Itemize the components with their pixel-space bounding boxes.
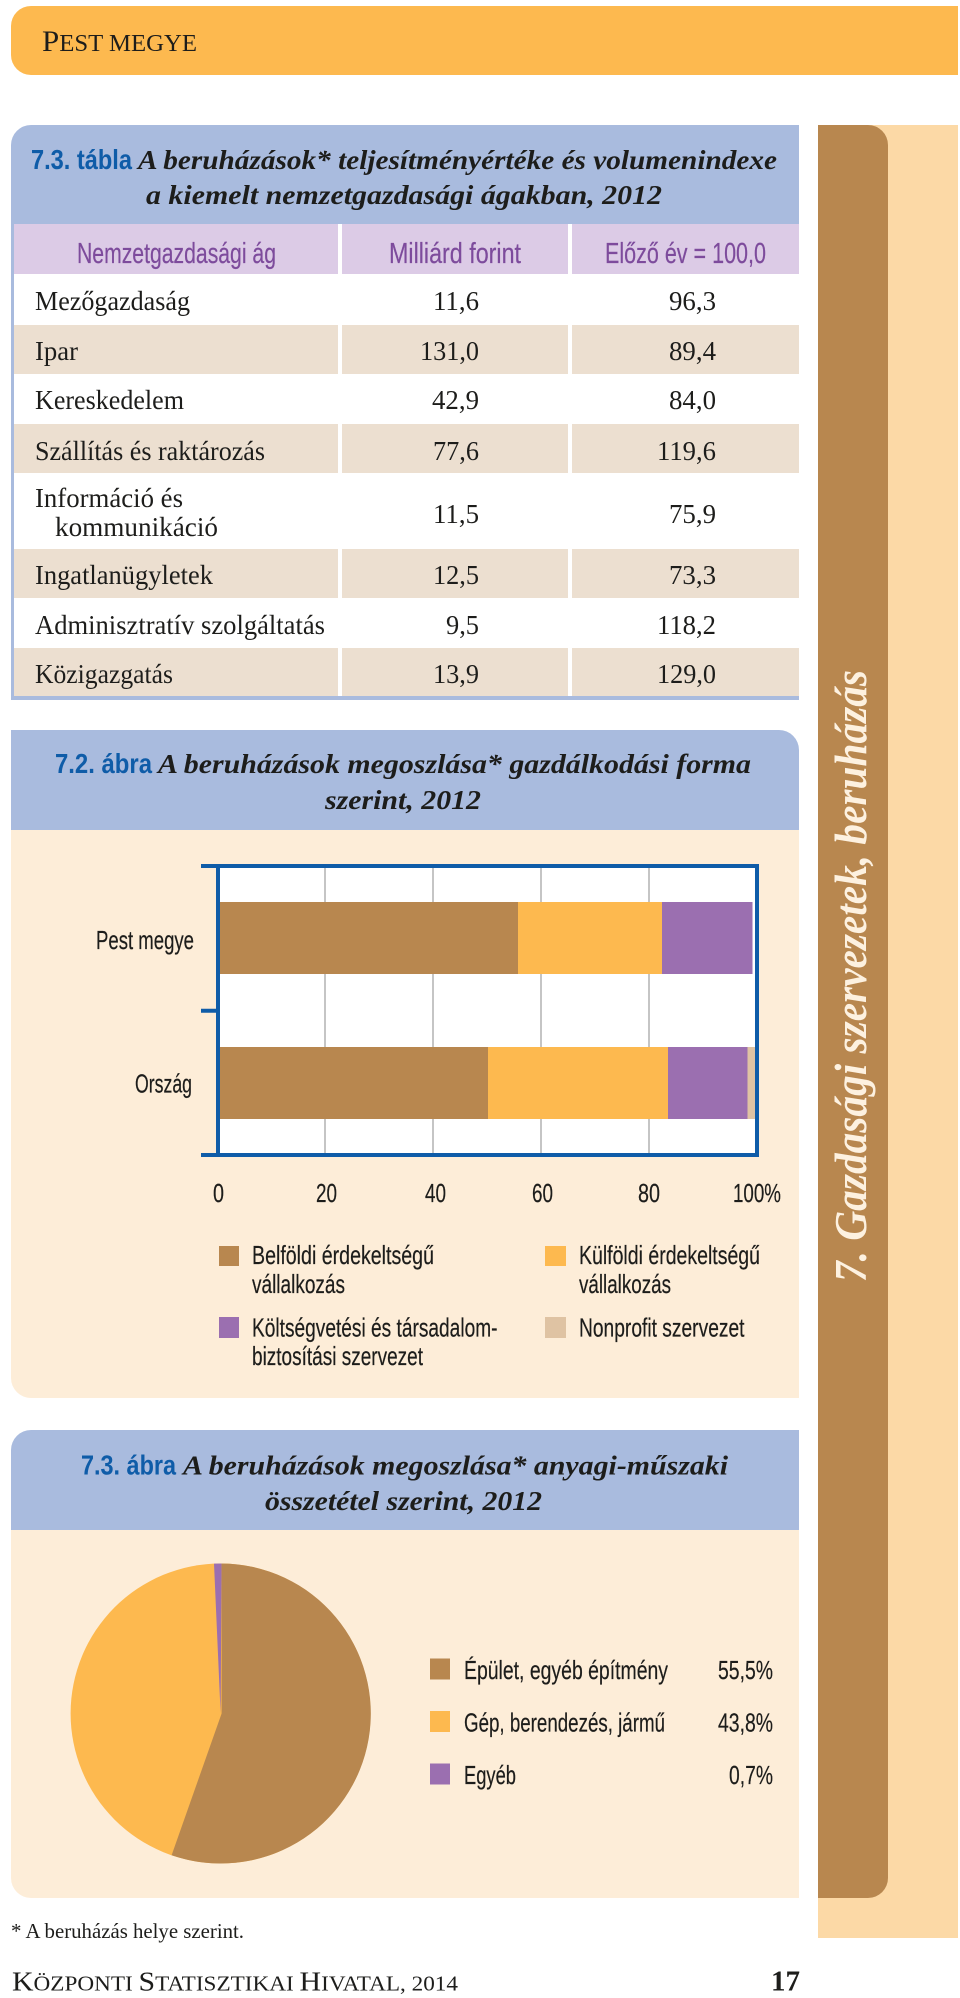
figure title: A beruházások megoszlása* gazdálkodási forma — [156, 749, 751, 779]
row: Információ és kommunikáció — [35, 483, 716, 542]
row: Adminisztratív szolgáltatás: Adminisztratív szolgáltatás — [35, 610, 325, 640]
row: Közigazgatás: 13,9 — [433, 659, 479, 689]
legend: ownership forms: vállalkozás — [252, 1269, 345, 1299]
axis labels: 60 — [532, 1178, 553, 1208]
panel: figure 7.3 — [11, 1430, 799, 1898]
panel: figure 7.2 — [11, 730, 799, 1398]
legend: pie — [430, 1655, 773, 1790]
row: Információ és kommunikáció: 75,9 — [669, 499, 716, 529]
axis labels: 100% — [733, 1178, 781, 1208]
table header row — [14, 224, 799, 274]
row: Közigazgatás — [14, 648, 799, 696]
legend: ownership forms: biztosítási szervezet — [252, 1341, 424, 1371]
row: Ingatlanügyletek — [14, 549, 799, 598]
row: Mezőgazdaság: Mezőgazdaság — [35, 286, 190, 316]
row: Információ és kommunikáció: Információ és — [35, 483, 183, 513]
table header row: Előző év = 100,0 — [605, 238, 766, 270]
bar: Pest megye — [220, 902, 752, 974]
legend: ownership forms: Belföldi érdekeltségű — [252, 1240, 434, 1270]
row: Ipar: Ipar — [35, 336, 78, 366]
bar: Ország — [220, 1047, 755, 1119]
axis labels: 80 — [638, 1178, 660, 1208]
axis labels — [213, 1178, 781, 1208]
side tab: chapter title — [818, 125, 958, 1938]
legend: ownership forms: vállalkozás — [579, 1269, 671, 1299]
row: Szállítás és raktározás: 119,6 — [657, 436, 716, 466]
footer: publisher: KÖZPONTI STATISZTIKAI HIVATAL, 2014 — [12, 1966, 459, 1996]
row: Szállítás és raktározás: 77,6 — [433, 436, 479, 466]
legend: ownership forms: Külföldi érdekeltségű — [579, 1240, 760, 1270]
table title: a kiemelt nemzetgazdasági ágakban, 2012 — [146, 180, 662, 210]
legend: pie: 55,5% — [718, 1655, 773, 1685]
row: Ingatlanügyletek: 73,3 — [669, 560, 716, 590]
panel: table 7.3 — [11, 125, 799, 700]
figure title: 7.3. ábra — [81, 1450, 176, 1480]
row: Ipar — [14, 325, 799, 374]
row: Információ és kommunikáció: kommunikáció — [55, 512, 218, 542]
stacked bar chart: Ország — [135, 1068, 192, 1098]
figure title: összetétel szerint, 2012 — [265, 1486, 542, 1516]
row: Kereskedelem — [35, 385, 716, 415]
page header band — [11, 6, 958, 75]
pie chart — [71, 1563, 371, 1864]
table title — [11, 125, 799, 224]
row: Információ és kommunikáció: 11,5 — [433, 499, 479, 529]
figure title — [11, 730, 799, 830]
row: Mezőgazdaság: 11,6 — [433, 286, 479, 316]
row: Kereskedelem: Kereskedelem — [35, 385, 184, 415]
table header row: Milliárd forint — [389, 238, 521, 270]
legend: ownership forms: Költségvetési és társadalom- — [252, 1312, 498, 1342]
row: Ipar: 131,0 — [420, 336, 479, 366]
legend: ownership forms: Nonprofit szervezet — [579, 1312, 745, 1342]
stacked bar chart — [96, 866, 781, 1208]
footer: page number: 17 — [771, 1966, 800, 1998]
figure title: szerint, 2012 — [324, 785, 481, 815]
figure title — [11, 1430, 799, 1530]
legend: pie: Épület, egyéb építmény — [464, 1655, 668, 1685]
axis labels: 20 — [316, 1178, 337, 1208]
panel background — [11, 830, 799, 1398]
row: Adminisztratív szolgáltatás — [35, 610, 716, 640]
heading: county name: PEST MEGYE — [42, 25, 197, 58]
row: Adminisztratív szolgáltatás: 9,5 — [446, 610, 479, 640]
row: Mezőgazdaság: 96,3 — [669, 286, 716, 316]
table header row: Nemzetgazdasági ág — [77, 238, 276, 270]
legend: ownership forms — [219, 1240, 760, 1371]
row: Szállítás és raktározás: Szállítás és raktározás — [35, 436, 265, 466]
row: Adminisztratív szolgáltatás: 118,2 — [657, 610, 716, 640]
table title: A beruházások* teljesítményértéke és volumenindexe — [136, 145, 777, 175]
legend: pie: Egyéb — [464, 1760, 516, 1790]
row: Kereskedelem: 84,0 — [669, 385, 716, 415]
row: Ingatlanügyletek: Ingatlanügyletek — [35, 560, 213, 590]
row: Ingatlanügyletek: 12,5 — [433, 560, 479, 590]
axis labels: 40 — [425, 1178, 446, 1208]
stacked bar chart: Pest megye — [96, 925, 194, 955]
legend: pie: 43,8% — [718, 1708, 773, 1738]
panel background — [11, 1529, 799, 1898]
row: Közigazgatás: 129,0 — [657, 659, 716, 689]
side tab: chapter title: 7. Gazdasági szervezetek, beruházás — [825, 670, 876, 1282]
table frame — [11, 224, 799, 700]
table title: 7.3. tábla — [31, 144, 132, 175]
row: Közigazgatás: Közigazgatás — [35, 659, 173, 689]
legend: pie: Gép, berendezés, jármű — [464, 1708, 665, 1738]
figure title: A beruházások megoszlása* anyagi-műszaki — [181, 1450, 729, 1480]
figure title: 7.2. ábra — [55, 748, 152, 779]
row: Ipar: 89,4 — [669, 336, 716, 366]
legend: pie: 0,7% — [729, 1760, 773, 1790]
row: Mezőgazdaság — [14, 274, 799, 324]
axis labels: 0 — [213, 1178, 224, 1208]
footnote: * A beruházás helye szerint. — [11, 1919, 244, 1943]
row: Kereskedelem: 42,9 — [432, 385, 479, 415]
row: Szállítás és raktározás — [14, 424, 799, 473]
